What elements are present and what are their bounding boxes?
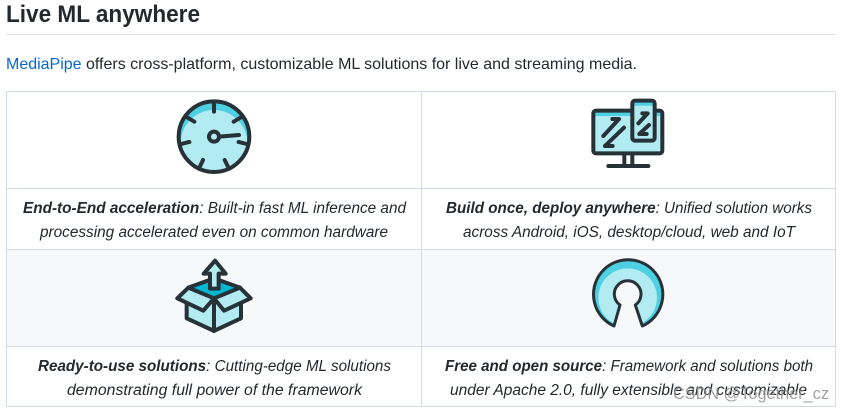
- text: End-to-End acceleration: [23, 200, 407, 241]
- panel: feature table: [6, 91, 836, 407]
- icon: speed gauge: [179, 101, 249, 177]
- text: Build once, deploy anywhere: Build once, deploy anywhere: Unified solution works: [446, 200, 812, 217]
- text: Ready-to-use solutions: demonstrating full power of the framework: [67, 382, 363, 399]
- heading: Live ML anywhere: Live ML anywhere: [6, 1, 200, 28]
- text: Free and open source: under Apache 2.0, fully extensible and customizable: [450, 382, 807, 399]
- text: Ready-to-use solutions: [38, 358, 391, 399]
- text: Free and open source: Free and open source: Framework and solutions both: [445, 358, 813, 375]
- text: Free and open source: [445, 358, 813, 399]
- text: End-to-End acceleration: processing accelerated even on common hardware: [39, 224, 388, 241]
- watermark: CSDN @Together_cz: [673, 384, 829, 403]
- intro text: MediaPipe offers cross-platform, customizable ML solutions for live and streaming media.: [6, 56, 637, 73]
- text: Build once, deploy anywhere: across Android, iOS, desktop/cloud, web and IoT: [463, 224, 797, 241]
- icon: open box with arrow: [177, 261, 251, 331]
- text: Ready-to-use solutions: Ready-to-use solutions: Cutting-edge ML solutions: [38, 358, 391, 375]
- text: End-to-End acceleration: End-to-End acceleration: Built-in fast ML inference and: [23, 200, 407, 217]
- text: Build once, deploy anywhere: [446, 200, 812, 241]
- icon: monitor and phone: [593, 101, 662, 166]
- icon: open source keyhole: [593, 260, 663, 327]
